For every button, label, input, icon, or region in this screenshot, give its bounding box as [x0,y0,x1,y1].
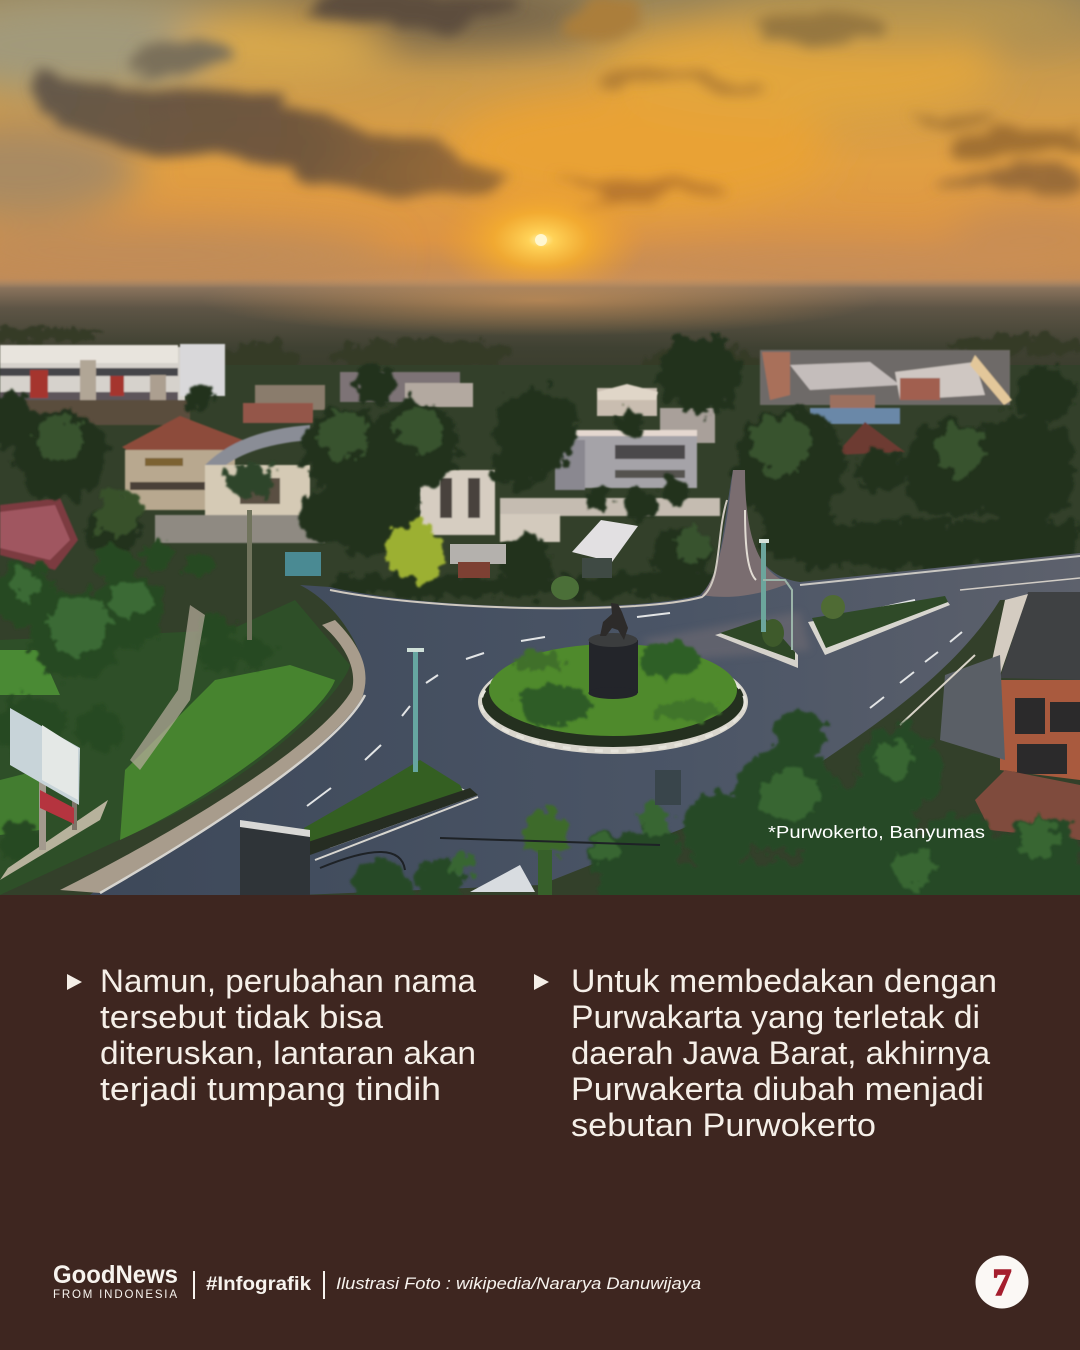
town trees [0,335,1080,597]
bullet text: right column: sebutan Purwokerto [571,1107,876,1143]
road edge lines [330,500,727,608]
right buildings [900,592,1080,840]
road network [90,470,1080,895]
bullet text: left column: diteruskan, lantaran akan [100,1035,476,1071]
foreground trees [349,707,1080,895]
bullet text: right column: daerah Jawa Barat, akhirnya [571,1035,990,1071]
ground base [0,365,1080,895]
bullet triangle [534,974,549,990]
right islands [808,598,950,655]
bullet text: left column: terjadi tumpang tindih [100,1071,441,1107]
photo: Purwokerto roundabout at sunset [0,0,1080,933]
lower-left island [328,788,478,848]
roundabout with horse statue [478,603,748,754]
page number badge [976,1256,1028,1308]
sky with sunset clouds [0,0,1080,302]
logo: GoodNews [53,1261,178,1301]
billboard [10,708,80,850]
left lawn and trees [0,464,366,895]
town mid-ground [0,344,1012,570]
lane dashes [307,600,962,806]
left buildings [0,346,186,402]
traffic islands [304,595,950,860]
distant horizon and town haze [0,279,1080,365]
photo credit: Ilustrasi Foto : wikipedia/Nararya Danuwijaya [336,1274,701,1293]
photo caption: *Purwokerto, Banyumas [768,822,985,842]
small shelter and yellow-green tree [285,520,638,600]
bullet text: left column: Namun, perubahan nama [100,963,476,999]
footer [53,1261,701,1301]
bullet text: right column: Untuk membedakan dengan [571,963,997,999]
roadside signboard [240,770,681,895]
fence [0,800,108,880]
bullet text: right column: Purwakarta yang terletak di [571,999,980,1035]
page number badge: 7 [992,1262,1012,1304]
bullet text: right column: Purwakerta diubah menjadi [571,1071,984,1107]
logo: GoodNews: FROM INDONESIA [53,1289,178,1301]
logo: GoodNews: GoodNews [53,1261,178,1289]
bullet triangle [67,974,82,990]
bullet text: right column [534,963,997,1143]
hashtag: #Infografik [206,1273,311,1295]
right complex [760,350,1010,405]
bullet text: left column [67,963,476,1107]
street lamps [407,539,792,772]
bullet text: left column: tersebut tidak bisa [100,999,383,1035]
